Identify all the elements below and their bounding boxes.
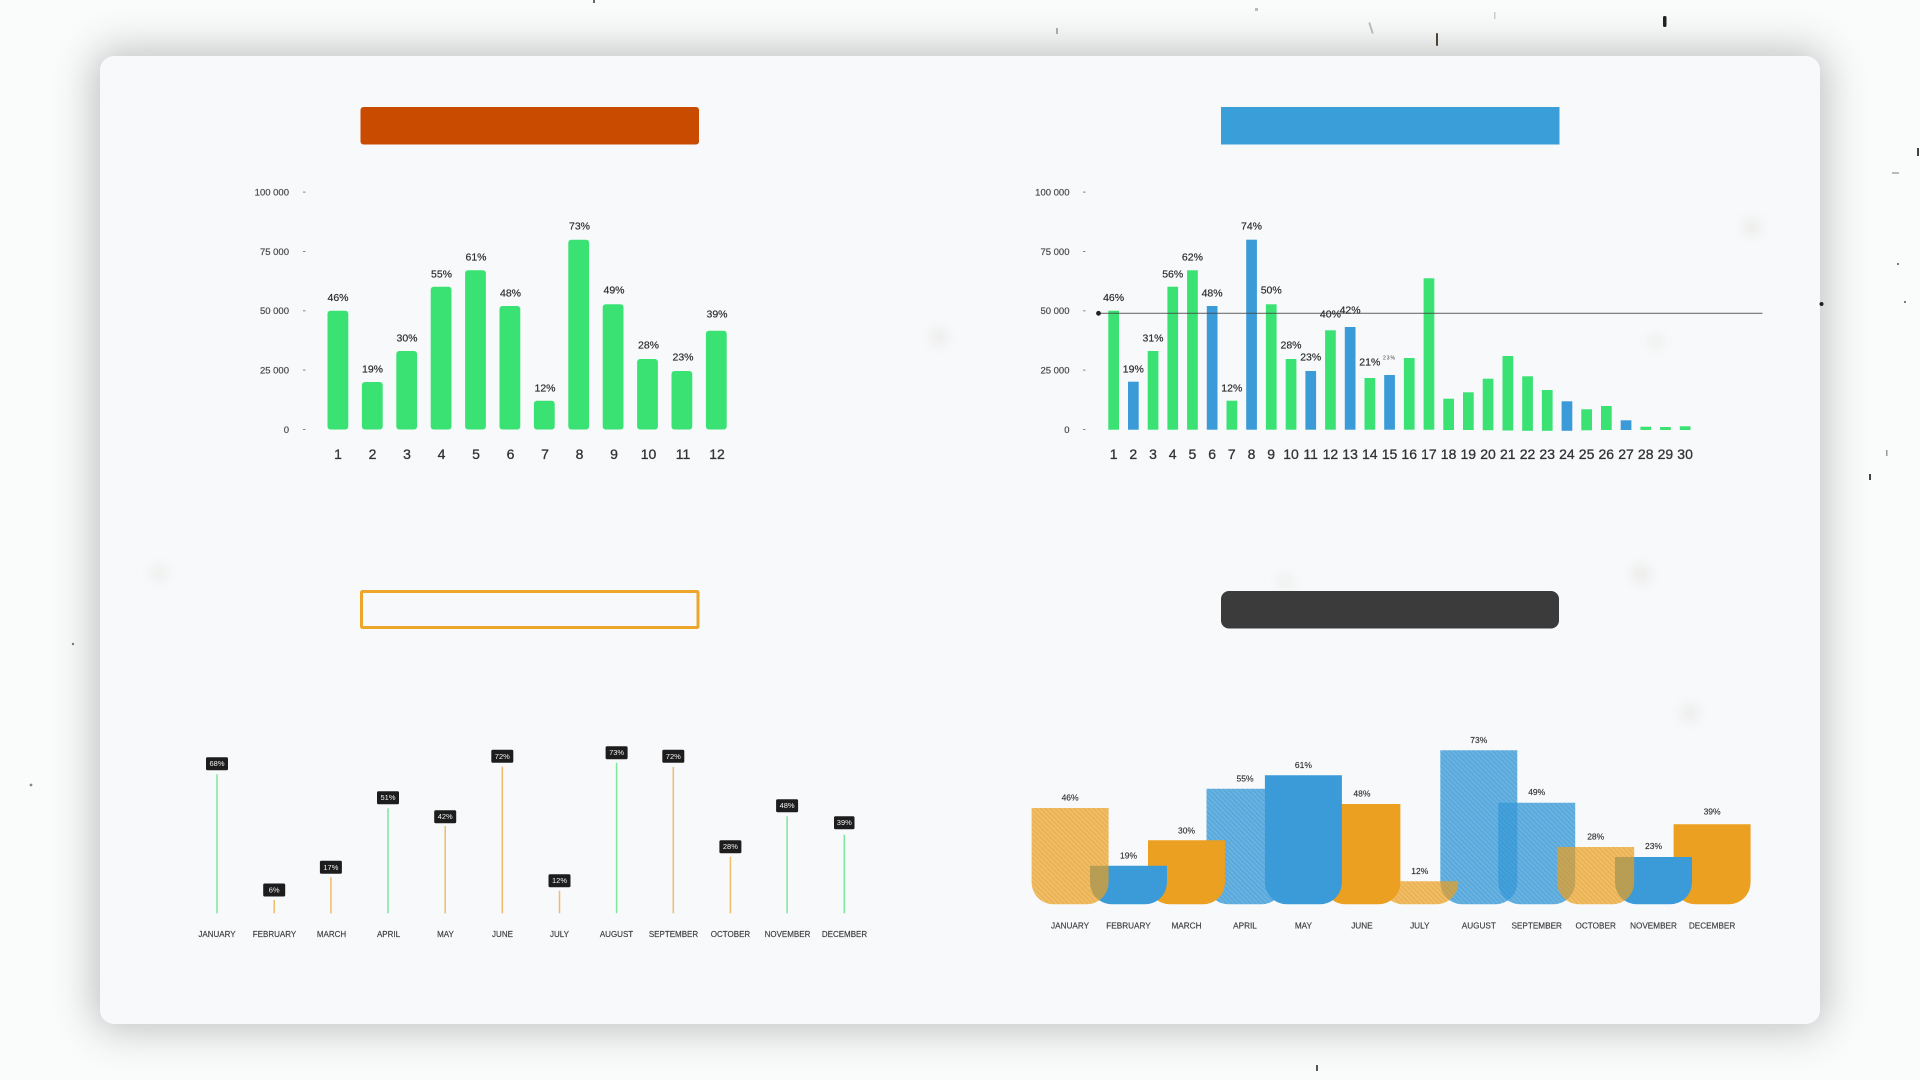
percentage labels [1103,221,1396,394]
chart: 12 green bars with percentages [255,188,728,462]
value tags [206,746,854,896]
percentage labels: 73% [1470,735,1488,745]
x axis numbers: 18 [1441,446,1457,462]
percentage labels: 61% [1295,760,1312,770]
x axis numbers: 2 [1129,446,1137,462]
blue bars [1128,240,1631,431]
tag values: 73% [609,748,624,757]
x axis numbers: 5 [1189,446,1197,462]
x axis numbers: 13 [1342,446,1358,462]
x axis numbers: 21 [1500,446,1516,462]
x axis numbers: 12 [1323,446,1338,462]
percentage labels: 40% [1320,309,1341,321]
y axis: 25 000 [260,366,289,376]
percentage labels: 31% [1142,332,1164,344]
month labels: AUGUST [600,930,633,939]
x axis numbers: 26 [1599,446,1614,462]
x axis numbers: 11 [1303,446,1318,462]
percentage labels: 48% [500,287,521,299]
x axis numbers: 14 [1362,446,1378,462]
percentage labels: 74% [1241,221,1262,233]
x axis numbers: 10 [641,446,656,462]
heading bar: orange-red solid [360,107,699,144]
x axis numbers: 10 [1283,446,1299,462]
percentage labels [327,221,728,394]
percentage labels: 28% [1280,340,1302,352]
percentage labels: 23% [672,351,694,363]
month labels: OCTOBER [1576,922,1616,931]
x axis numbers: 6 [507,446,515,462]
month labels: MAY [437,930,455,939]
month labels: JUNE [492,930,513,939]
x axis numbers [334,446,725,462]
x axis numbers: 8 [1248,446,1256,462]
month labels: SEPTEMBER [1511,922,1562,931]
month labels: APRIL [1233,922,1257,931]
y axis: 50 000 [260,306,289,317]
heading bar: orange outline [362,592,698,628]
x axis numbers: 4 [438,446,446,462]
month labels: DECEMBER [1689,922,1735,931]
threshold line with dot [1096,311,1762,316]
percentage labels [1062,735,1721,876]
x axis numbers: 23 [1539,446,1555,462]
percentage labels: 28% [638,339,659,351]
percentage labels: 23% [1645,841,1662,851]
percentage labels: 12% [534,382,556,394]
percentage labels: 23% [1383,356,1396,362]
percentage labels: 12% [1221,382,1242,394]
percentage labels: 62% [1182,252,1203,264]
x axis numbers: 3 [403,446,411,462]
y axis: 75 000 [1040,247,1070,258]
percentage labels: 48% [1202,287,1223,299]
percentage labels: 30% [396,332,418,344]
tag values: 72% [495,752,510,761]
month labels: AUGUST [1462,922,1496,931]
heading bar: dark solid [1221,591,1559,628]
month labels: DECEMBER [822,930,867,939]
month labels: JANUARY [198,930,236,939]
x axis numbers: 5 [472,446,480,462]
y axis: 100 000 [255,188,289,198]
y axis [255,188,306,436]
percentage labels: 21% [1359,356,1380,368]
percentage labels: 49% [1528,787,1546,797]
month labels: MARCH [1171,922,1202,931]
x axis numbers: 2 [369,446,377,462]
stems [217,763,844,913]
tag values: 17% [323,863,339,872]
month labels: NOVEMBER [765,930,811,939]
percentage labels: 42% [1340,304,1361,316]
tag values: 42% [438,812,453,821]
x axis numbers: 1 [1110,446,1118,462]
y axis [1035,188,1086,436]
y axis: 75 000 [260,247,289,258]
x axis numbers: 9 [1267,446,1275,462]
tag values: 12% [552,876,567,885]
y axis: 0 [284,425,289,436]
percentage labels: 48% [1353,789,1371,799]
percentage labels: 19% [1123,363,1144,375]
month labels [1051,922,1735,931]
month labels: APRIL [377,930,401,939]
tag values: 72% [666,752,681,761]
percentage labels: 46% [1103,292,1124,304]
x axis numbers: 25 [1579,446,1595,462]
chart: 30 green and blue bars with threshold line [1035,188,1762,462]
x axis numbers [1110,446,1693,462]
percentage labels: 12% [1411,866,1429,876]
month labels: OCTOBER [711,930,750,939]
x axis numbers: 7 [541,446,549,462]
percentage labels: 55% [431,268,452,280]
month labels: JUNE [1351,922,1373,931]
x axis numbers: 4 [1169,446,1177,462]
y axis: 50 000 [1040,306,1070,317]
y axis: 25 000 [1040,366,1070,376]
x axis numbers: 1 [334,446,342,462]
x axis numbers: 16 [1401,446,1417,462]
x axis numbers: 12 [709,446,725,462]
x axis numbers: 19 [1461,446,1476,462]
month labels: MARCH [317,930,346,939]
tag values [209,748,852,894]
tag values: 68% [209,759,225,768]
x axis numbers: 9 [610,446,618,462]
percentage labels: 46% [327,292,349,304]
x axis numbers: 7 [1228,446,1236,462]
x axis numbers: 30 [1677,446,1693,462]
percentage labels: 50% [1261,285,1282,297]
percentage labels: 56% [1162,268,1183,280]
percentage labels: 19% [1120,851,1137,861]
x axis numbers: 24 [1559,446,1575,462]
x axis numbers: 20 [1480,446,1496,462]
x axis numbers: 22 [1520,446,1535,462]
tag values: 51% [380,793,396,802]
month labels: JANUARY [1051,922,1090,931]
tag values: 6% [269,886,280,894]
x axis numbers: 17 [1421,446,1437,462]
percentage labels: 39% [1704,806,1721,816]
percentage labels: 30% [1178,825,1195,835]
percentage labels: 23% [1300,352,1321,364]
percentage labels: 73% [569,221,590,233]
percentage labels: 19% [362,363,383,375]
x axis numbers: 29 [1658,446,1673,462]
month labels: NOVEMBER [1630,922,1677,931]
chart: overlapping rounded month columns [1032,735,1751,931]
chart: monthly lollipop lines with dark tags [198,746,867,939]
y axis: 0 [1064,425,1070,436]
x axis numbers: 28 [1638,446,1654,462]
month labels: JULY [550,930,570,939]
x axis numbers: 15 [1382,446,1397,462]
percentage labels: 55% [1236,773,1254,783]
x axis numbers: 11 [676,446,690,462]
percentage labels: 39% [706,309,728,321]
percentage labels: 28% [1587,831,1605,841]
tag values: 48% [780,801,795,810]
month labels: SEPTEMBER [649,930,698,939]
heading bar: blue solid [1221,107,1560,144]
x axis numbers: 8 [576,446,584,462]
percentage labels: 49% [603,285,625,297]
percentage labels: 61% [465,252,487,264]
month labels: FEBRUARY [1106,922,1151,931]
month labels: FEBRUARY [253,930,297,939]
columns [1032,750,1751,904]
tag values: 28% [723,842,738,851]
month labels: JULY [1410,922,1430,931]
green bars [328,240,727,430]
x axis numbers: 6 [1208,446,1216,462]
x axis numbers: 3 [1149,446,1157,462]
y axis: 100 000 [1035,188,1070,198]
green bars [1108,270,1690,431]
month labels: MAY [1295,922,1313,931]
x axis numbers: 27 [1618,446,1634,462]
month labels [198,930,867,939]
percentage labels: 46% [1062,793,1079,803]
tag values: 39% [837,818,852,827]
